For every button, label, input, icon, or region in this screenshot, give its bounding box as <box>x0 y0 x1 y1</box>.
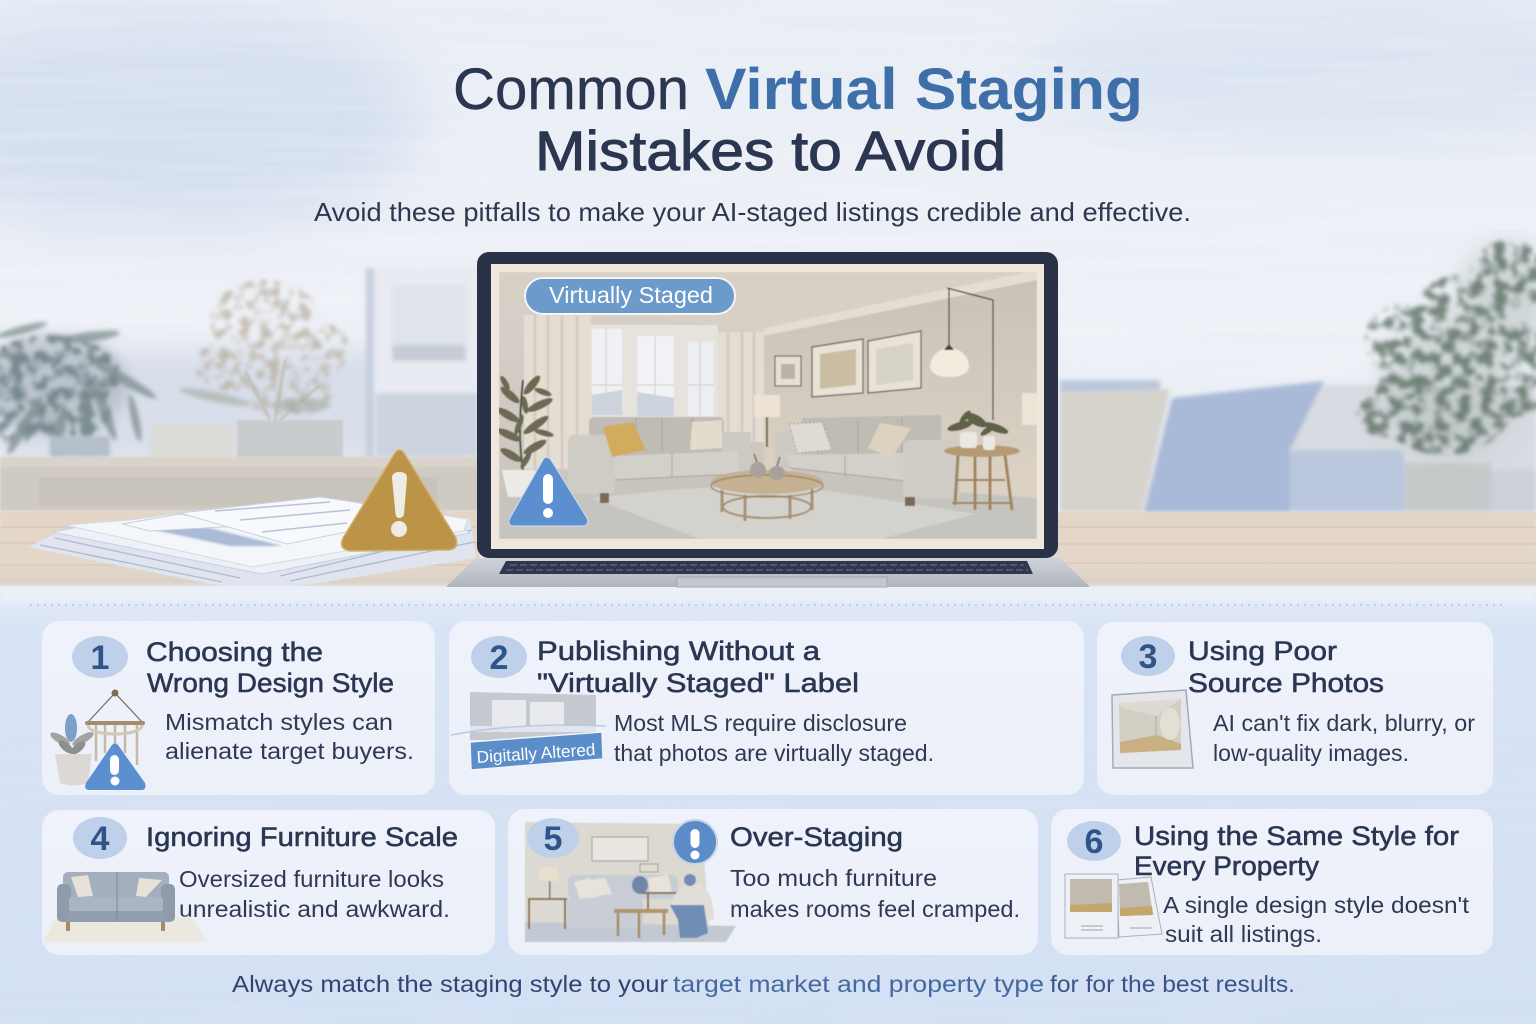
description 4: Oversized furniture looks <box>179 866 444 892</box>
title 2 <box>537 636 859 698</box>
number badge 4 <box>73 817 127 859</box>
description 1 <box>165 709 414 764</box>
title 6 <box>1134 821 1459 881</box>
title: Virtual Staging <box>705 57 1143 122</box>
description 5: Too much furniture <box>730 865 937 891</box>
number badge 1: 1 <box>91 639 109 677</box>
description 1: Mismatch styles can <box>165 709 393 735</box>
description 4: unrealistic and awkward. <box>179 896 450 922</box>
title 1: Choosing the <box>146 637 323 667</box>
backdrop plant right <box>1357 240 1536 462</box>
title 2: "Virtually Staged" Label <box>537 668 859 698</box>
number badge 3 <box>1121 636 1175 676</box>
title 3: Source Photos <box>1188 668 1384 698</box>
staged room photo <box>495 270 1037 539</box>
title 4: Ignoring Furniture Scale <box>146 822 458 852</box>
subtitle: Avoid these pitfalls to make your AI-staged listings credible and effective. <box>314 197 1191 227</box>
title 5: Over-Staging <box>730 822 903 852</box>
wall art <box>775 331 921 397</box>
icon: blue warning triangle <box>509 457 588 526</box>
footer note <box>232 971 1295 997</box>
badge: virtually staged <box>525 278 735 314</box>
sofa right <box>775 415 960 506</box>
number badge 5 <box>527 818 579 858</box>
curtains <box>524 315 764 469</box>
description 3: low-quality images. <box>1213 740 1409 766</box>
laptop base <box>446 558 1090 587</box>
icon: alert circle <box>673 820 717 864</box>
card 4: furniture scale <box>42 810 495 955</box>
title: Common <box>453 57 689 122</box>
number badge 1 <box>72 636 128 678</box>
number badge 5: 5 <box>544 820 562 858</box>
title 6: Using the Same Style for <box>1134 821 1459 851</box>
icon: poor photo print <box>1112 690 1193 768</box>
description 6 <box>1163 892 1469 947</box>
title 1 <box>146 637 394 698</box>
lower panel background <box>0 586 1536 1024</box>
number badge 6 <box>1067 821 1121 861</box>
icon: crowded room <box>525 822 736 942</box>
number badge 6: 6 <box>1085 823 1103 861</box>
table top <box>0 511 1536 587</box>
backdrop plant middle <box>179 280 350 420</box>
description 3 <box>1213 710 1475 766</box>
laptop <box>446 252 1090 587</box>
description 1: alienate target buyers. <box>165 738 414 764</box>
number badge 2: 2 <box>490 639 508 677</box>
description 2: that photos are virtually staged. <box>614 740 934 766</box>
title 3 <box>1188 636 1384 698</box>
pendant floor lamp <box>930 288 993 420</box>
title 3: Using Poor <box>1188 636 1337 666</box>
description 2: Most MLS require disclosure <box>614 710 907 736</box>
description 5 <box>730 865 1020 922</box>
number badge 4: 4 <box>91 820 110 858</box>
footer note: for for the best results. <box>1050 971 1295 997</box>
windows <box>591 325 718 418</box>
title: Mistakes to Avoid <box>535 119 1006 182</box>
sofa left <box>568 417 751 503</box>
side table and plants <box>944 409 1020 510</box>
number badge 2 <box>471 636 527 678</box>
backdrop vase <box>237 420 343 458</box>
left plant <box>495 373 554 497</box>
icon: digitally altered photo: Digitally Altered <box>476 740 596 767</box>
description 4 <box>179 866 450 922</box>
backdrop plant left <box>0 319 159 457</box>
description 3: AI can't fix dark, blurry, or <box>1213 710 1475 736</box>
icon: oversized sofa <box>43 872 207 942</box>
far right wall sconce <box>1022 393 1037 425</box>
icon: two matching photos <box>1065 874 1162 938</box>
title 6: Every Property <box>1134 851 1320 881</box>
badge: virtually staged: Virtually Staged <box>549 282 713 308</box>
backdrop wall band right <box>1060 380 1160 394</box>
description 6: A single design style doesn't <box>1163 892 1469 918</box>
icon: gold warning triangle <box>342 450 457 551</box>
number badge 3: 3 <box>1139 638 1157 676</box>
title <box>453 57 1143 182</box>
icon: digitally altered photo <box>451 692 606 770</box>
footer note: Always match the staging style to your <box>232 971 668 997</box>
title 2: Publishing Without a <box>537 636 821 666</box>
card 3: poor source photos <box>1097 622 1493 795</box>
stacked papers <box>28 497 476 586</box>
title 1: Wrong Design Style <box>147 668 394 698</box>
backdrop wall art <box>366 268 478 458</box>
description 5: makes rooms feel cramped. <box>730 896 1020 922</box>
table lamp <box>754 395 780 447</box>
rug <box>594 488 974 539</box>
backdrop sideboard <box>0 457 480 511</box>
card 6: same style <box>1051 809 1493 955</box>
icon: plant, wall hanging and warning <box>48 690 145 790</box>
blurred room backdrop <box>0 240 1536 587</box>
laptop frame <box>477 252 1058 558</box>
description 6: suit all listings. <box>1165 921 1322 947</box>
backdrop sofa right <box>1060 381 1536 512</box>
page background <box>0 0 1536 590</box>
coffee table <box>711 454 823 521</box>
card 1: wrong design style <box>42 621 435 795</box>
description 2 <box>614 710 934 766</box>
card 2: missing label <box>449 621 1084 795</box>
card 5: over-staging <box>508 809 1038 955</box>
footer note: target market and property type <box>673 971 1044 997</box>
